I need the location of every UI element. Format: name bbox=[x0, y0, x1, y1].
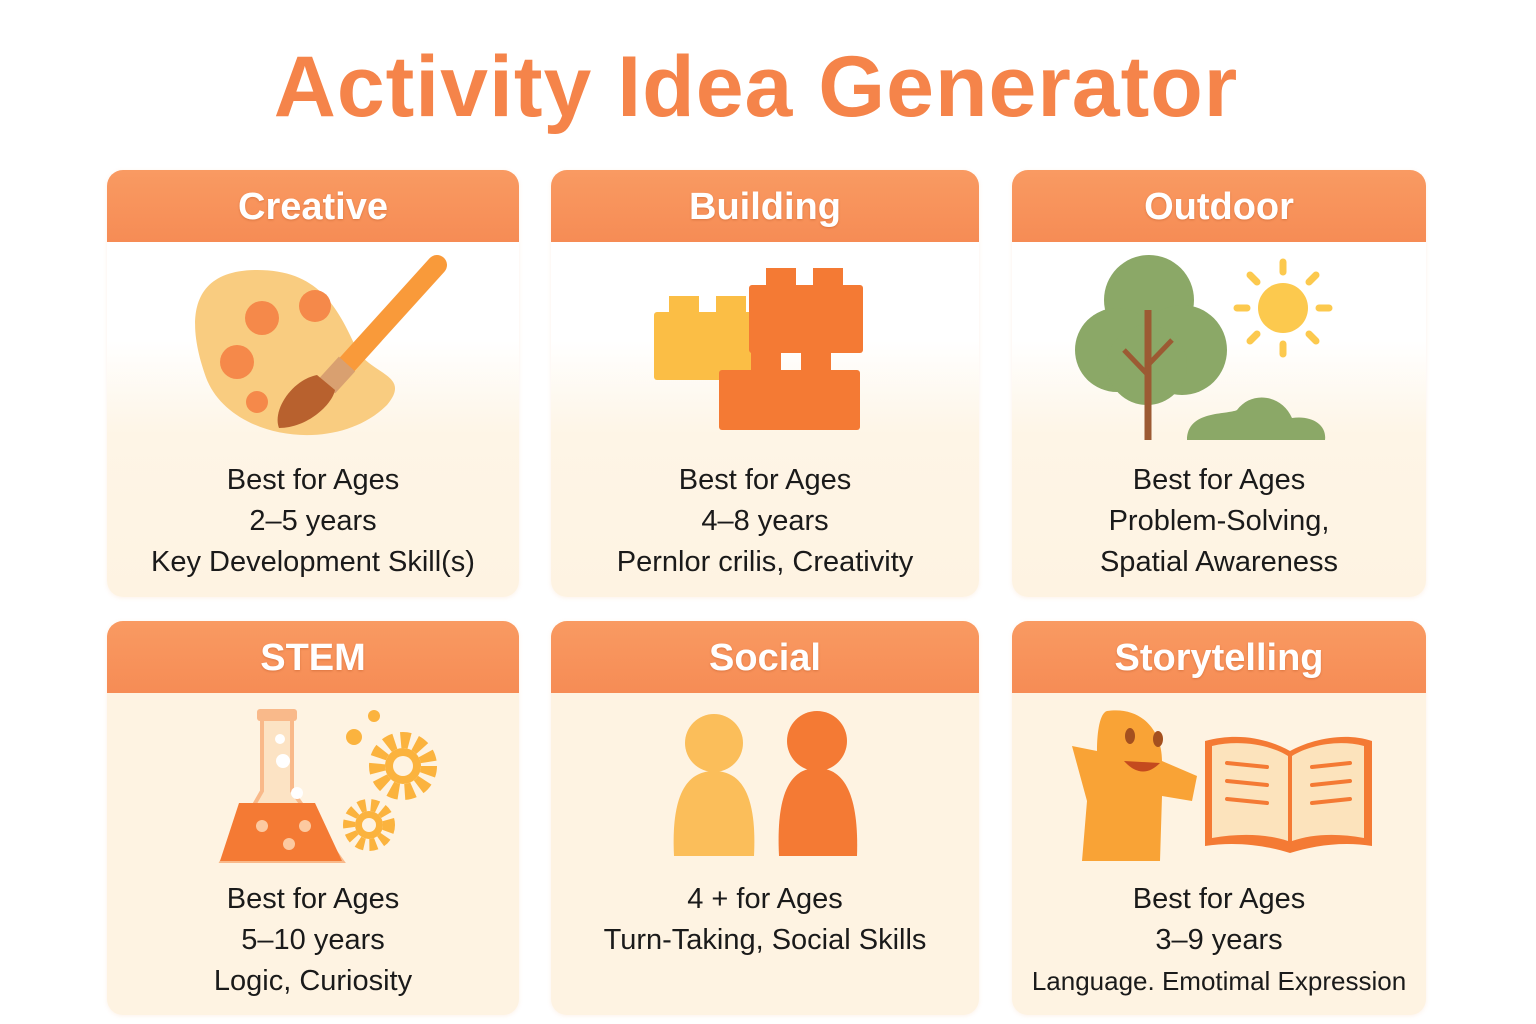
text: storytelling: Language. Emotimal Expression bbox=[1032, 966, 1406, 996]
panel: building bbox=[551, 170, 979, 597]
header: social: Social bbox=[709, 637, 821, 679]
icon: two people bbox=[674, 711, 858, 856]
title: Activity Idea Generator bbox=[274, 39, 1238, 135]
header: stem: STEM bbox=[260, 637, 366, 679]
icon: tree and sun bbox=[1075, 255, 1332, 440]
icon: flask and gears bbox=[218, 709, 437, 863]
header: creative: Creative bbox=[238, 186, 388, 228]
header: outdoor bbox=[1012, 170, 1426, 242]
header: stem bbox=[107, 621, 519, 693]
header: building: Building bbox=[689, 186, 841, 228]
text: creative: Key Development Skill(s) bbox=[151, 546, 475, 578]
text: building: 4–8 years bbox=[701, 505, 829, 537]
text: storytelling: Best for Ages bbox=[1133, 883, 1305, 915]
text: building: Pernlor crilis, Creativity bbox=[617, 546, 913, 578]
header: creative bbox=[107, 170, 519, 242]
icon: palette bbox=[195, 255, 447, 436]
text: creative: 2–5 years bbox=[249, 505, 377, 537]
header: storytelling: Storytelling bbox=[1114, 637, 1324, 679]
panel: outdoor bbox=[1012, 170, 1426, 597]
text: social: Turn-Taking, Social Skills bbox=[604, 924, 926, 956]
header: storytelling bbox=[1012, 621, 1426, 693]
header: building bbox=[551, 170, 979, 242]
text: building bbox=[617, 464, 914, 578]
text: stem: Best for Ages bbox=[227, 883, 399, 915]
text: storytelling: 3–9 years bbox=[1155, 924, 1283, 956]
panel: creative bbox=[107, 170, 519, 597]
text: social bbox=[604, 883, 926, 956]
panel: stem bbox=[107, 621, 519, 1015]
panel: storytelling bbox=[1012, 621, 1426, 1015]
text: outdoor bbox=[1100, 464, 1338, 578]
text: storytelling bbox=[1032, 883, 1406, 996]
icon: blocks bbox=[654, 268, 863, 430]
icon: puppet and book bbox=[1072, 710, 1372, 861]
text: creative bbox=[151, 464, 475, 578]
panel: social bbox=[551, 621, 979, 1015]
text: stem: 5–10 years bbox=[241, 924, 385, 956]
text: social: 4 + for Ages bbox=[687, 883, 843, 915]
text: stem: Logic, Curiosity bbox=[214, 965, 412, 997]
text: outdoor: Problem-Solving, bbox=[1109, 505, 1329, 537]
header: outdoor: Outdoor bbox=[1144, 186, 1294, 228]
text: outdoor: Spatial Awareness bbox=[1100, 546, 1338, 578]
header: social bbox=[551, 621, 979, 693]
text: outdoor: Best for Ages bbox=[1133, 464, 1305, 496]
text: creative: Best for Ages bbox=[227, 464, 399, 496]
text: building: Best for Ages bbox=[679, 464, 851, 496]
text: stem bbox=[214, 883, 412, 997]
